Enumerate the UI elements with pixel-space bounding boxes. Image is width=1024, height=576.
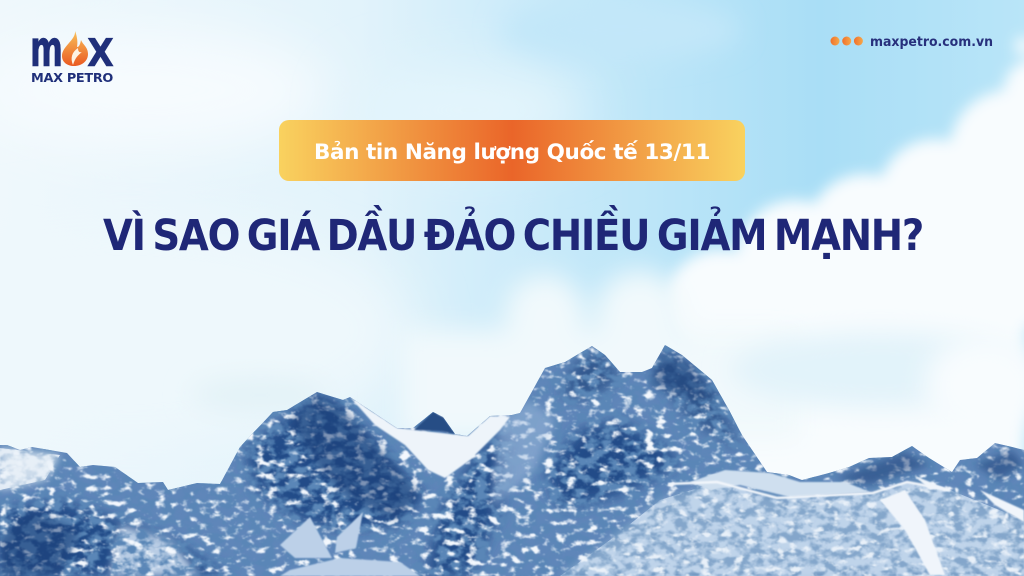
snow patches on left peak [280, 512, 420, 576]
snow noise [0, 340, 1024, 576]
logo: Max Petro [30, 20, 114, 85]
logo wordmark: X [87, 31, 114, 75]
small dark peak [414, 412, 455, 434]
pale foreground wash [0, 400, 1024, 576]
glacier [350, 397, 510, 478]
icon: three dots [830, 36, 863, 46]
rock noise [0, 340, 1024, 576]
title: VÌ SAO GIÁ DẦU ĐẢO CHIỀU GIẢM MẠNH? [103, 205, 923, 261]
date banner [279, 120, 745, 181]
snowfield above ridge [690, 470, 870, 497]
logo wordmark [30, 20, 114, 78]
logo name: MAX PETRO [31, 70, 113, 85]
white snow slopes [880, 476, 1024, 575]
mountain range [0, 340, 1024, 576]
date banner: Bản tin Năng lượng Quốc tế 13/11 [314, 140, 710, 164]
logo wordmark: m [30, 20, 63, 78]
clouds [190, 37, 1024, 500]
website link: maxpetro.com.vn [870, 35, 993, 50]
pale foreground base [560, 482, 1024, 576]
shadowed rock faces [0, 350, 740, 576]
snow ridge [668, 482, 950, 498]
dark dense peak wash [0, 355, 1024, 576]
icon: flame [62, 31, 88, 66]
